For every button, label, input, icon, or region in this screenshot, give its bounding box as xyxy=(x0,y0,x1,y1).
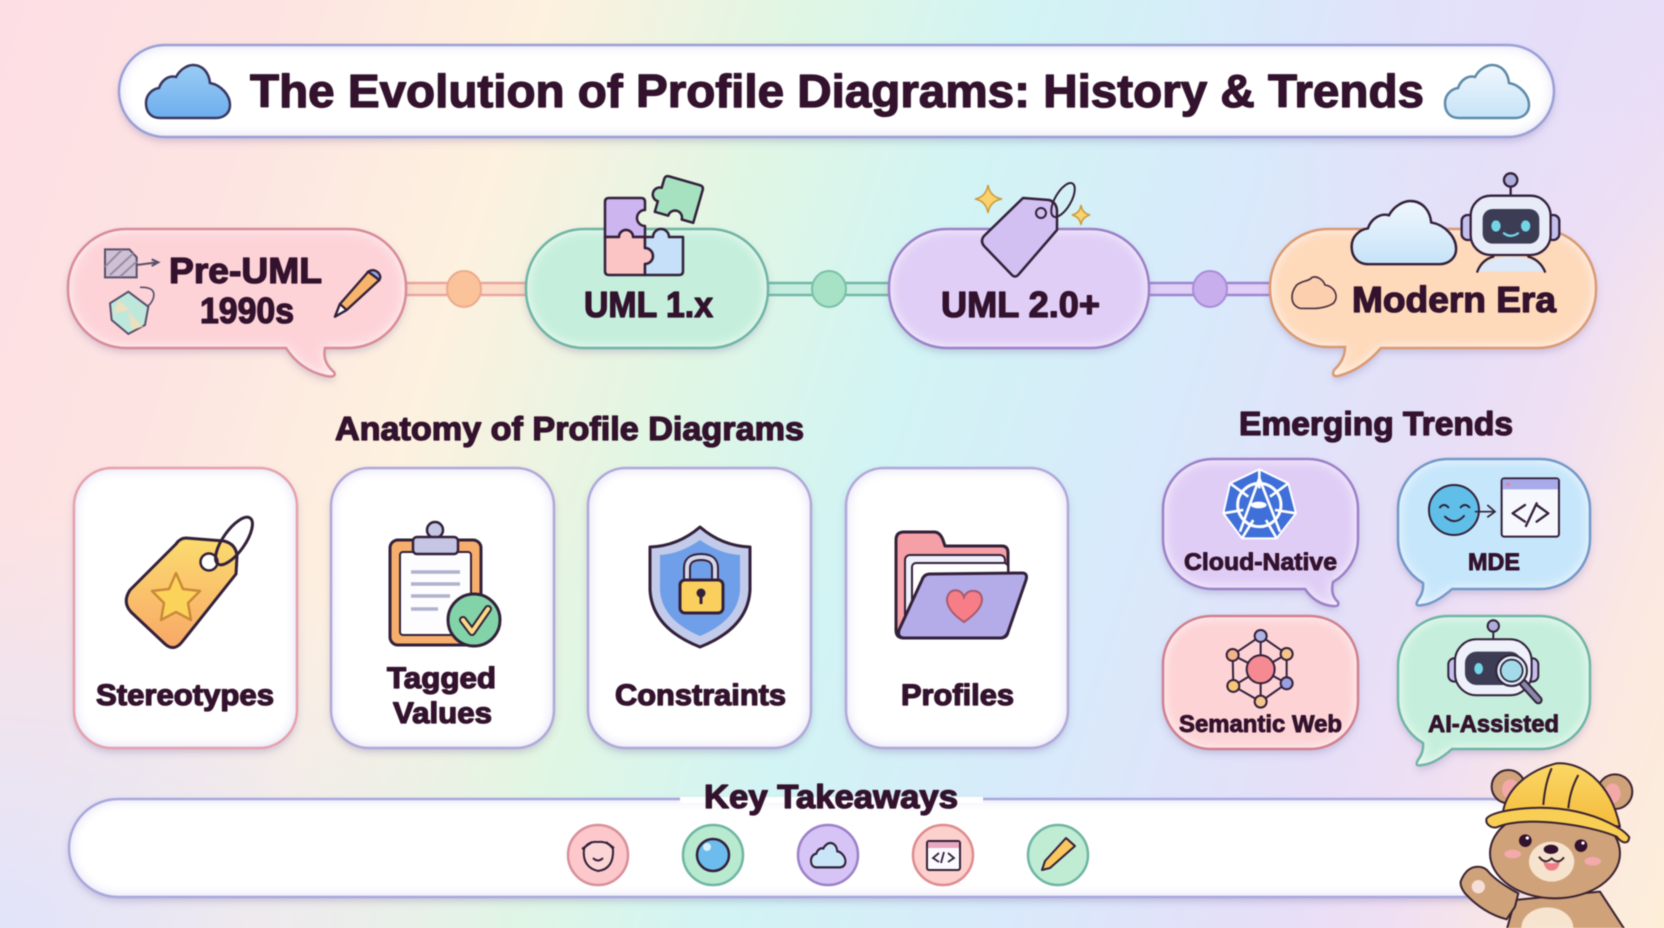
trend: Cloud-Native xyxy=(1163,459,1358,606)
icon: small cloud xyxy=(1292,277,1336,309)
timeline: Pre-UML 1990s xyxy=(68,229,406,376)
label: Cloud-Native xyxy=(1184,549,1337,576)
timeline connectors xyxy=(400,271,1275,307)
takeaway icon: pencil xyxy=(1028,825,1088,885)
trend: MDE xyxy=(1398,459,1590,605)
icon: robot with magnifier xyxy=(1448,620,1538,700)
heading: anatomy: Anatomy of Profile Diagrams xyxy=(335,410,804,447)
card: Stereotypes xyxy=(74,468,297,748)
timeline: Pre-UML 1990s: 1990s xyxy=(200,290,294,331)
icon: sketched globe xyxy=(110,287,154,334)
card: Tagged Values xyxy=(331,468,554,748)
takeaway icon: blue sphere xyxy=(683,825,743,885)
label: MDE xyxy=(1468,549,1520,576)
heading: emerging trends: Emerging Trends xyxy=(1239,405,1513,442)
icon: purple tag with sparkles xyxy=(975,180,1090,276)
icon: blue cloud xyxy=(146,65,230,118)
icon: pencil xyxy=(335,270,380,317)
icon: folder with heart xyxy=(896,532,1026,638)
label: UML 1.x xyxy=(584,284,713,325)
title text: The Evolution of Profile Diagrams: History & Trends xyxy=(250,65,1424,117)
label: Pre-UML xyxy=(169,250,322,291)
icon: clipboard with check xyxy=(390,522,500,646)
icon: cloud xyxy=(1352,201,1456,264)
trend: AI-Assisted xyxy=(1398,616,1590,765)
timeline: UML 2.0+ xyxy=(889,180,1149,348)
label: Stereotypes xyxy=(96,679,274,712)
heading: key takeaways: Key Takeaways xyxy=(704,778,958,815)
icon: pale cloud xyxy=(1445,65,1529,118)
icon: hatched box and arrow xyxy=(105,249,158,277)
label: Tagged xyxy=(387,662,496,695)
panel: key takeaways xyxy=(69,778,1540,897)
label: Modern Era xyxy=(1352,279,1557,320)
card: Tagged Values: Values xyxy=(393,697,492,730)
icon: shield with lock xyxy=(650,527,750,647)
icon: face to code window xyxy=(1429,478,1559,537)
label: Semantic Web xyxy=(1179,711,1342,738)
mascot: bear with hard hat xyxy=(1461,763,1632,928)
label: UML 2.0+ xyxy=(941,284,1100,325)
takeaway icon: cloud xyxy=(798,825,858,885)
takeaway icon: face xyxy=(568,825,628,885)
title banner xyxy=(119,45,1554,137)
timeline: UML 1.x xyxy=(526,173,768,348)
trend: Semantic Web xyxy=(1163,616,1358,749)
label: Constraints xyxy=(615,679,786,712)
card: Constraints xyxy=(588,468,811,748)
card: Profiles xyxy=(846,468,1068,748)
label: Profiles xyxy=(901,679,1014,712)
icon: robot xyxy=(1462,173,1559,272)
timeline: Modern Era xyxy=(1270,173,1596,376)
icon: star tag xyxy=(126,512,259,648)
icon: heptagon wheel xyxy=(1223,469,1296,538)
icon: puzzle pieces xyxy=(605,173,704,275)
label: AI-Assisted xyxy=(1428,711,1559,738)
takeaway icon: code window xyxy=(913,825,973,885)
icon: network graph xyxy=(1227,630,1293,708)
